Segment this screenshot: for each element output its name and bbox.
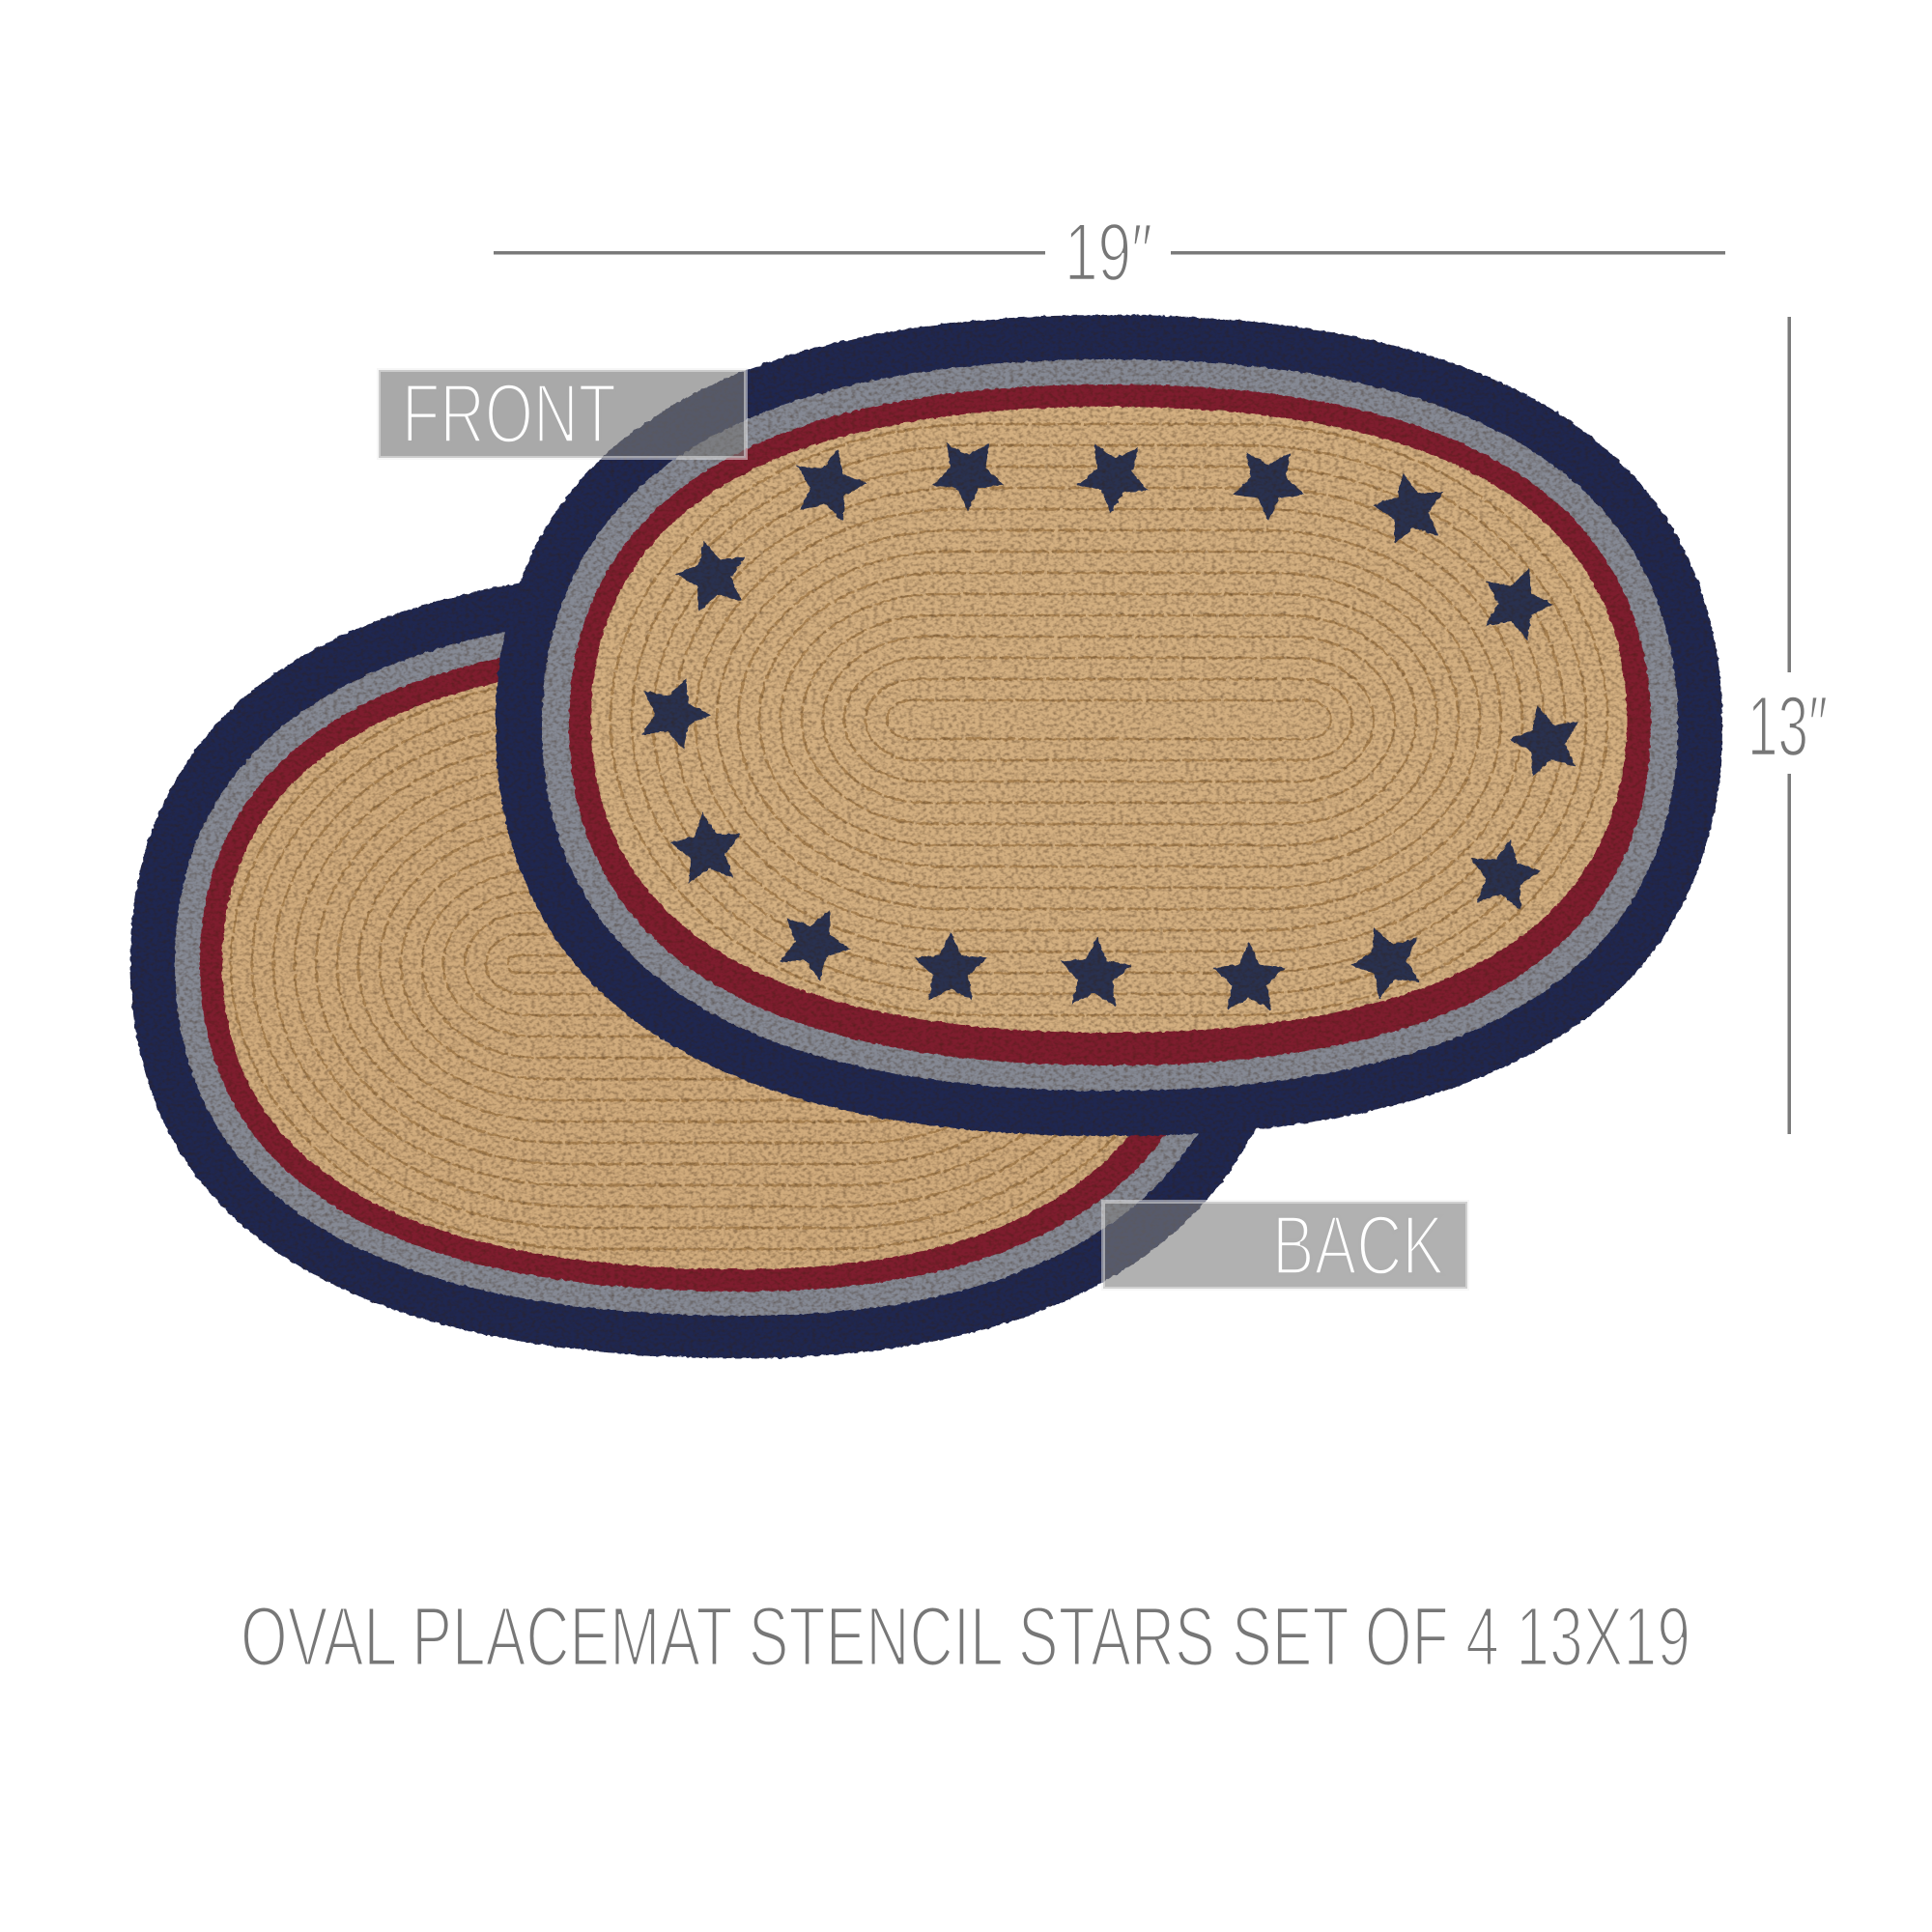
back jute braid rows xyxy=(231,679,1187,1249)
front gray band xyxy=(542,359,1678,1091)
back jute field xyxy=(222,659,1190,1269)
back placemat xyxy=(130,566,1294,1358)
front navy border xyxy=(496,315,1722,1136)
height dimension: 13 inches: 13″ xyxy=(1747,678,1828,774)
back red band xyxy=(200,636,1220,1292)
infographic canvas xyxy=(129,224,1826,1665)
front jute field xyxy=(591,407,1627,1033)
width dimension: 19 inches: 19″ xyxy=(1065,207,1152,298)
ring of sixteen stencil stars xyxy=(629,440,1589,1010)
back gray band xyxy=(175,611,1246,1316)
back navy border xyxy=(130,566,1294,1358)
front red band xyxy=(569,384,1651,1065)
label: back: BACK xyxy=(1272,1199,1444,1293)
width dimension: 19 inches xyxy=(494,207,1725,298)
height dimension: 13 inches xyxy=(1747,317,1828,1134)
label: front: FRONT xyxy=(402,367,616,461)
front jute braid rows xyxy=(611,424,1607,1015)
label: back xyxy=(1103,1199,1467,1293)
front placemat xyxy=(496,315,1722,1136)
